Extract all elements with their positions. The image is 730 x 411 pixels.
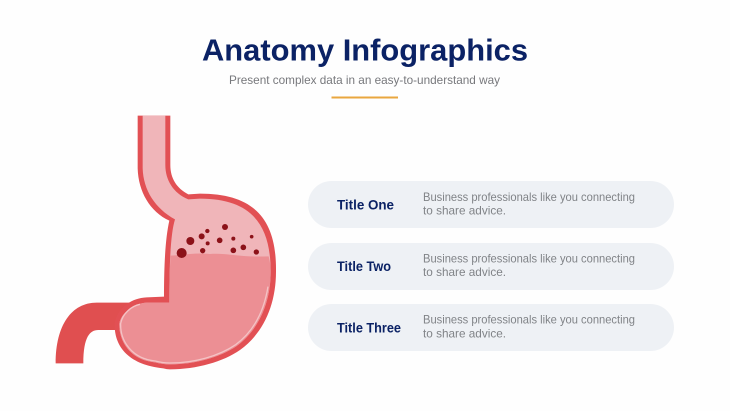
stomach interior bbox=[119, 116, 271, 364]
panel: title two bbox=[308, 243, 674, 290]
subtitle: Present complex data in an easy-to-understand way bbox=[229, 73, 500, 87]
heading: title one: Title One bbox=[337, 196, 394, 212]
stomach wall bbox=[115, 116, 276, 369]
text block: title one: to share advice. bbox=[423, 204, 506, 218]
panel: title one bbox=[308, 181, 674, 228]
text block: title three: to share advice. bbox=[423, 326, 506, 340]
title: Anatomy Infographics bbox=[202, 32, 528, 68]
heading: title three: Title Three bbox=[337, 320, 401, 336]
bubbles bbox=[177, 224, 259, 258]
heading: title two: Title Two bbox=[337, 258, 391, 274]
text block: title two: to share advice. bbox=[423, 265, 506, 279]
panel: title three bbox=[308, 304, 674, 351]
duodenum bbox=[56, 303, 133, 363]
text block: title two: Business professionals like you connecting bbox=[423, 251, 635, 265]
accent rule bbox=[332, 96, 398, 98]
lining highlight bbox=[121, 287, 268, 363]
gastric fluid bbox=[119, 253, 271, 364]
stomach illustration bbox=[56, 116, 276, 369]
text block: title three: Business professionals like you connecting bbox=[423, 313, 635, 327]
text block: title one: Business professionals like you connecting bbox=[423, 190, 635, 204]
